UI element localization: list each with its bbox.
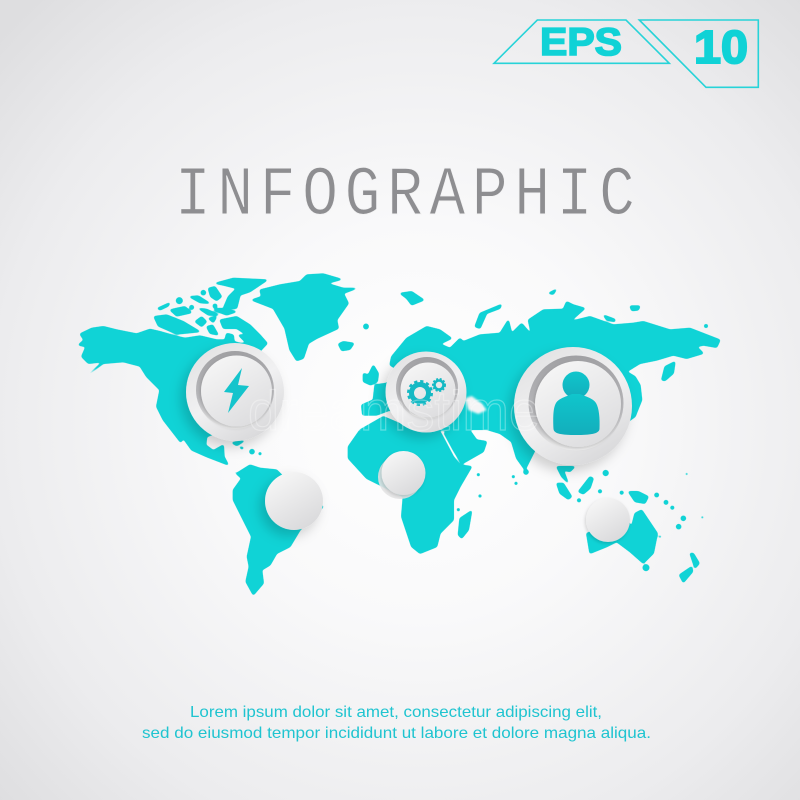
madagascar (458, 511, 472, 538)
plate (201, 356, 272, 426)
eurasia, africa and oceania (348, 289, 720, 583)
north america (78, 317, 267, 465)
EPS 10 badge: 10 (694, 21, 748, 73)
caption: Lorem ipsum dolor sit amet, consectetur adipiscing elit, (190, 704, 602, 721)
united kingdom (363, 365, 378, 385)
caribbean islands (232, 441, 261, 455)
canadian arctic islands (154, 278, 368, 335)
icon: gears (408, 379, 445, 404)
ring (196, 351, 274, 429)
greenland (252, 274, 357, 361)
ring (528, 356, 624, 450)
arctic and pacific islands (364, 289, 708, 583)
caption: sed do eiusmod tempor incididunt ut labore et dolore magna aliqua. (142, 725, 651, 742)
watermark: dreamstime (248, 379, 540, 442)
australia (587, 510, 657, 563)
ring (396, 357, 458, 419)
disc: south america (265, 472, 323, 530)
plate (400, 362, 456, 418)
africa (348, 417, 472, 553)
south america (228, 465, 323, 595)
icon: person (553, 372, 600, 435)
plate (535, 361, 621, 447)
disc: africa (378, 451, 426, 499)
caption (142, 704, 651, 742)
icon: lightning bolt (224, 368, 249, 413)
black sea (465, 396, 487, 414)
iceland (338, 342, 354, 351)
disc: australia (586, 498, 630, 542)
EPS 10 badge (494, 20, 758, 87)
button: gears (386, 352, 466, 432)
world map (78, 274, 720, 595)
title: INFOGRAPHIC (175, 156, 642, 236)
arabia (444, 431, 487, 464)
eurasia (362, 302, 720, 470)
americas and arctic (78, 274, 368, 595)
button: lightning (186, 343, 284, 441)
button: person (514, 347, 632, 465)
EPS 10 badge: EPS (540, 21, 622, 64)
